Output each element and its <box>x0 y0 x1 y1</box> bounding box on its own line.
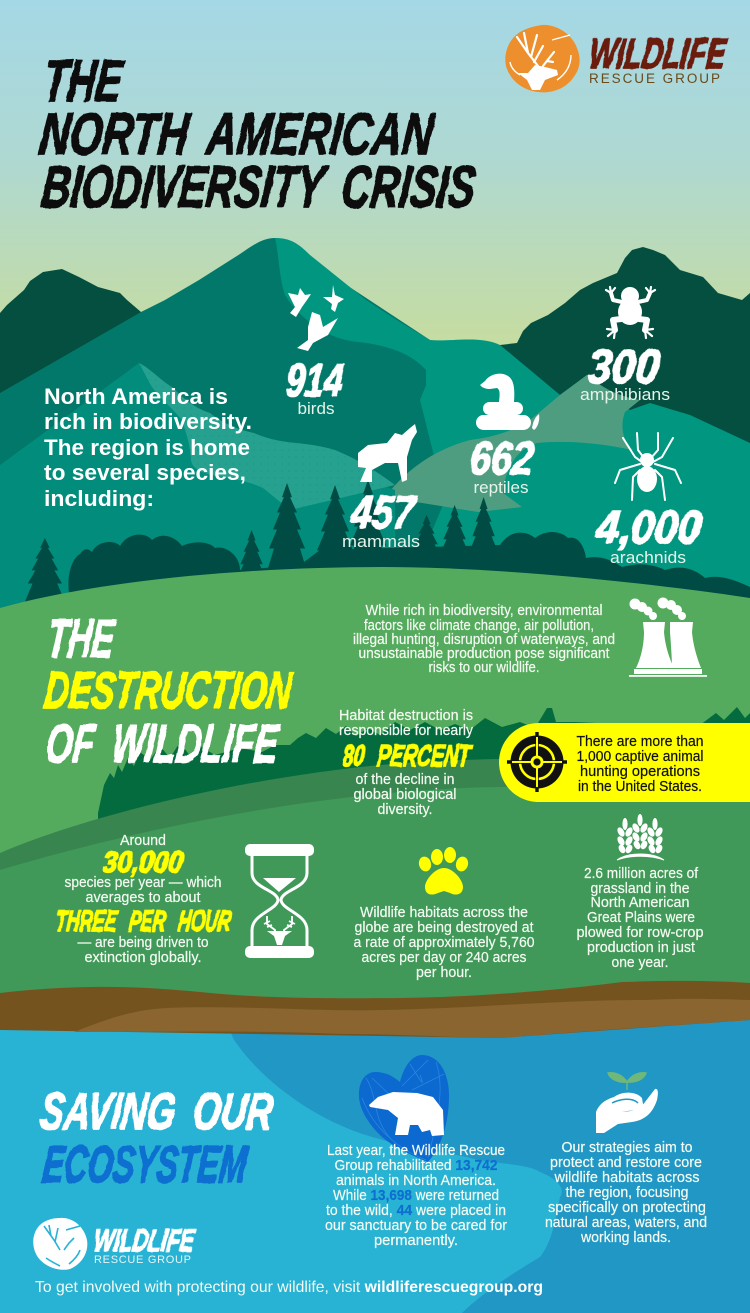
title: THE <box>41 47 127 114</box>
text: rehabilitated animals: Group rehabilitated 13,742 <box>334 1158 497 1174</box>
intro text: The region is home <box>44 435 250 460</box>
text: 30,000 species: extinction globally. <box>84 950 202 966</box>
logo: Wildlife Rescue Group (white) <box>33 1218 197 1270</box>
icon: wheat <box>616 814 664 860</box>
text: our strategies <box>545 1140 707 1246</box>
text: grassland plowed <box>576 866 704 971</box>
heading: the destruction of wildlife: THE <box>45 609 118 669</box>
callout: captive hunting: There are more than <box>576 734 704 750</box>
sky background <box>0 0 750 345</box>
icon: birds <box>288 285 344 351</box>
stat: birds: birds <box>298 400 334 418</box>
text: habitats destroyed <box>354 905 534 981</box>
text: grassland plowed: Great Plains were <box>587 910 695 926</box>
text: habitat destruction 80 percent: global biological <box>354 787 456 803</box>
text: habitats destroyed: a rate of approximately 5,760 <box>354 935 534 951</box>
text: our strategies: Our strategies aim to <box>562 1140 692 1156</box>
text: environmental factors: unsustainable production pose significant <box>358 646 610 662</box>
heading: saving our ecosystem: SAVING OUR <box>38 1083 276 1141</box>
title <box>37 47 479 220</box>
text: rehabilitated animals: Last year, the Wildlife Rescue <box>327 1143 505 1159</box>
icon: hourglass with deer <box>245 844 314 958</box>
heading: the destruction of wildlife: DESTRUCTION <box>42 662 296 720</box>
text: habitat destruction 80 percent <box>339 708 474 818</box>
text: rehabilitated animals: our sanctuary to be cared for <box>325 1218 507 1234</box>
brown riverbank <box>0 981 750 1038</box>
intro text <box>44 384 252 511</box>
text: our strategies: protect and restore core <box>550 1155 702 1171</box>
text: grassland plowed: production in just <box>587 940 695 956</box>
title: BIODIVERSITY CRISIS <box>39 153 479 220</box>
green hill section <box>0 567 750 1045</box>
text: habitats destroyed: acres per day or 240 acres <box>362 950 526 966</box>
icon: deer badge <box>505 25 580 92</box>
text: habitat destruction 80 percent: responsible for nearly <box>339 723 474 739</box>
text: habitats destroyed: Wildlife habitats across the <box>360 905 528 921</box>
mountain landscape <box>0 238 750 620</box>
footer call to action: To get involved with protecting our wildlife, visit wildliferescuegroup.org <box>35 1279 543 1296</box>
logo: Wildlife Rescue Group (white): WILDLIFE <box>92 1223 197 1258</box>
stat: mammals <box>342 424 420 551</box>
text: our strategies: wildlife habitats across <box>554 1170 700 1186</box>
icon: factory cooling towers <box>629 598 707 677</box>
text: 30,000 species: species per year — which <box>64 875 222 891</box>
text: habitats destroyed: globe are being destroyed at <box>354 920 534 936</box>
stat: amphibians <box>580 287 670 404</box>
text: 30,000 species: THREE PER HOUR <box>54 906 233 938</box>
callout: captive hunting: hunting operations <box>580 764 700 780</box>
stat: arachnids <box>593 433 704 567</box>
logo: Wildlife Rescue Group (colour) <box>505 25 730 92</box>
callout: captive hunting: in the United States. <box>578 779 702 795</box>
text: grassland plowed: plowed for row-crop <box>576 925 704 941</box>
text: our strategies: working lands. <box>580 1230 671 1246</box>
text: rehabilitated animals <box>325 1143 507 1249</box>
text: environmental factors: factors like climate change, air pollution, <box>364 618 594 634</box>
text: environmental factors: illegal hunting, disruption of waterways, and <box>353 632 615 648</box>
icon: hand holding sprout <box>596 1073 658 1133</box>
intro text: rich in biodiversity. <box>44 409 252 434</box>
text: environmental factors: risks to our wildlife. <box>428 660 540 676</box>
text: habitat destruction 80 percent: Habitat destruction is <box>339 708 473 724</box>
stat: arachnids: arachnids <box>610 549 686 567</box>
text: grassland plowed: North American <box>590 895 690 911</box>
icon: deer badge white <box>33 1218 87 1270</box>
icon: snake <box>476 374 539 430</box>
text: 30,000 species: averages to about <box>86 890 200 906</box>
text: habitats destroyed: per hour. <box>416 965 472 981</box>
text: grassland plowed: 2.6 million acres of <box>584 866 699 882</box>
text: habitat destruction 80 percent: 80 PERCENT <box>341 740 473 773</box>
text: grassland plowed: grassland in the <box>590 881 690 897</box>
heading: saving our ecosystem <box>38 1083 276 1194</box>
title: NORTH AMERICAN <box>37 100 438 167</box>
icon: polar bear in scribbled heart <box>359 1055 449 1162</box>
stat: birds <box>284 285 346 418</box>
heading: the destruction of wildlife: OF WILDLIFE <box>43 714 282 774</box>
icon: spider <box>615 433 681 500</box>
heading: saving our ecosystem: ECOSYSTEM <box>40 1136 251 1194</box>
icon: crosshair target <box>507 732 567 792</box>
text: 30,000 species: 30,000 <box>101 847 185 879</box>
heading: the destruction of wildlife <box>42 609 296 774</box>
stat: mammals: mammals <box>342 533 420 551</box>
text: 30,000 species: Around <box>120 833 166 849</box>
stat: mammals: 457 <box>348 486 419 538</box>
icon: frog <box>606 287 655 338</box>
stat: reptiles: reptiles <box>474 479 528 497</box>
stat: reptiles <box>468 374 539 497</box>
intro text: North America is <box>44 384 228 409</box>
text: habitat destruction 80 percent: of the decline in <box>356 772 454 788</box>
logo: Wildlife Rescue Group (colour): RESCUE GROUP <box>589 71 720 86</box>
intro text: including: <box>44 486 154 511</box>
callout: captive hunting: 1,000 captive animal <box>576 749 704 765</box>
stat: birds: 914 <box>284 354 346 406</box>
text: our strategies: specifically on protecting <box>548 1200 706 1216</box>
icon: paw print <box>417 847 470 895</box>
text: habitat destruction 80 percent: diversity. <box>378 802 432 818</box>
stat: reptiles: 662 <box>468 432 536 484</box>
text: our strategies: the region, focusing <box>566 1185 688 1201</box>
stat: arachnids: 4,000 <box>593 501 704 553</box>
icon: wolf <box>358 424 417 482</box>
forest silhouette <box>0 480 750 620</box>
text: rehabilitated animals: permanently. <box>374 1233 458 1249</box>
text: environmental factors: While rich in biodiversity, environmental <box>366 603 602 619</box>
text: rehabilitated animals: to the wild, 44 were placed in <box>326 1203 506 1219</box>
intro text: to several species, <box>44 460 246 485</box>
stat: amphibians: amphibians <box>580 386 670 404</box>
text: rehabilitated animals: animals in North America. <box>336 1173 496 1189</box>
text: environmental factors <box>353 603 615 676</box>
text: 30,000 species: — are being driven to <box>78 935 208 951</box>
text: rehabilitated animals: While 13,698 were returned <box>333 1188 499 1204</box>
water section <box>0 1020 750 1313</box>
text: our strategies: natural areas, waters, and <box>545 1215 707 1231</box>
text: grassland plowed: one year. <box>612 955 668 971</box>
logo: Wildlife Rescue Group (white): RESCUE GROUP <box>94 1254 191 1266</box>
callout: captive hunting <box>499 723 750 802</box>
text: 30,000 species <box>54 833 233 966</box>
stat: amphibians: 300 <box>586 340 662 394</box>
